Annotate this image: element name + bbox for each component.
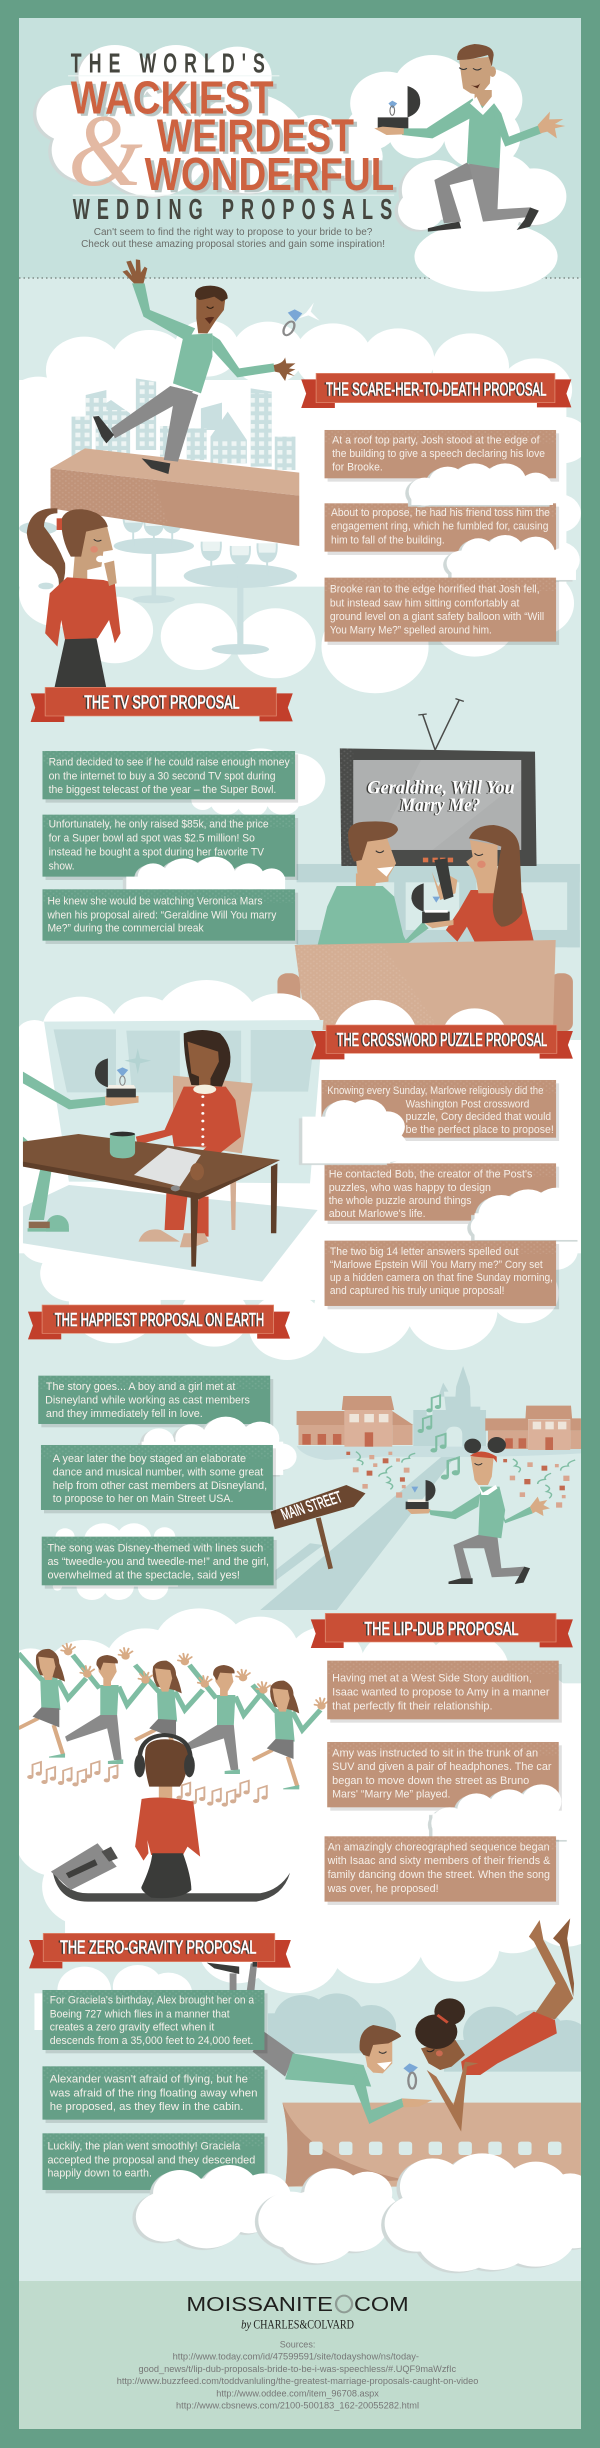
green box two [42, 2066, 268, 2123]
text: scare three: but instead saw him sitting comfortably at [330, 596, 520, 609]
green box one [38, 1376, 273, 1427]
dancer hands [61, 1644, 328, 1710]
text: lip-dub one: that perfectly fit their relationship. [332, 1699, 493, 1712]
title block [68, 44, 565, 250]
cloud: man lower [398, 153, 566, 243]
man's leg [23, 1137, 69, 1232]
brown box two [327, 1742, 562, 1811]
green box three [42, 1537, 277, 1589]
main street buildings right [485, 1406, 582, 1450]
text: tv two: for a Super bowl ad spot was $2.5 million! So [49, 831, 255, 844]
footer background [19, 2281, 581, 2429]
logo: by Charles & Colvard: CHARLES&COLVARD [253, 2317, 354, 2331]
text: crossword three: The two big 14 letter answers spelled out [330, 1245, 519, 1258]
brown box one [327, 1661, 562, 1723]
title rules [68, 75, 394, 196]
sofa [277, 940, 573, 1032]
ring box in hand [365, 85, 420, 135]
falling man [93, 259, 295, 474]
man with mouse ears [406, 1437, 550, 1584]
brown box two [325, 1163, 559, 1224]
dancer one [18, 1649, 86, 1758]
text: tv three: when his proposal aired: “Geraldine Will You marry [47, 908, 276, 921]
brown box three [325, 1836, 559, 1905]
castle [297, 1366, 581, 1460]
brown box three [325, 1241, 559, 1309]
banner: zero-gravity: THE ZERO-GRAVITY PROPOSAL [60, 1938, 256, 1958]
brown box one [321, 1080, 559, 1141]
text: tv two: show. [49, 859, 75, 872]
text: lip-dub one: Having met at a West Side Story audition, [332, 1671, 532, 1684]
section: happiest proposal [28, 1305, 582, 1610]
text: crossword one: puzzle, Cory decided that would [406, 1110, 551, 1123]
text: scare three: Brooke ran to the edge horrified that Josh fell, [330, 582, 540, 595]
dancer five [253, 1681, 320, 1789]
text: crossword one: be the perfect place to propose! [406, 1123, 554, 1136]
rooftop tables and glasses [19, 513, 297, 655]
seated woman with headphones [51, 1735, 290, 1902]
couple on sofa [318, 821, 534, 945]
text panel: scare-her-to-death [301, 373, 576, 645]
text: tv three: He knew she would be watching Veronica Mars [47, 894, 263, 907]
section: TV spot [31, 687, 580, 1032]
section: zero-gravity [29, 1918, 589, 2193]
section: lip-dub [6, 1608, 600, 1993]
text: scare one: the building to give a speech declaring his love [332, 447, 545, 460]
text: crossword two [329, 1167, 532, 1220]
box three [325, 578, 559, 645]
sources list: http://www.oddee.com/item_96708.aspx [216, 2389, 379, 2399]
text: tv three: Me?” during the commercial break [47, 921, 204, 934]
text: crossword three [330, 1245, 553, 1297]
ampersand: & [68, 94, 143, 208]
text: happiest three: The song was Disney-themed with lines such [47, 1541, 263, 1554]
music note rows [27, 1761, 268, 1807]
logo: Moissanite.com: COM [354, 2292, 409, 2316]
story section background [19, 278, 581, 2281]
header clouds [36, 45, 566, 292]
banner: TV spot: THE TV SPOT PROPOSAL [84, 693, 240, 713]
text: tv one: Rand decided to see if he could raise enough money [49, 755, 290, 768]
section: crossword [15, 980, 581, 1360]
text: crossword two: He contacted Bob, the creator of the Post's [329, 1167, 532, 1180]
text: happiest two [53, 1452, 267, 1505]
banner: zero-gravity [29, 1933, 291, 1968]
cloud over box two [447, 535, 576, 580]
sources list: good_news/t/lip-dub-proposals-bride-to-be-i-was-speechless/#.UQF9maWzfIc [139, 2365, 456, 2375]
text: zero-gravity three: Luckily, the plan went smoothly! Graciela [47, 2139, 241, 2152]
green box two [42, 815, 298, 880]
music notes [418, 1395, 460, 1480]
big cloud: lip-dub [6, 1608, 600, 1993]
text: lip-dub three: An amazingly choreographed sequence began [328, 1840, 550, 1853]
sources list: Sources: [280, 2340, 315, 2350]
text: scare one: At a roof top party, Josh stood at the edge of [332, 433, 540, 446]
streamers [356, 1452, 575, 1498]
text: zero-gravity one: descends from a 35,000 feet to 24,000 feet. [50, 2034, 253, 2047]
airplane body [282, 2103, 581, 2187]
text: zero-gravity three: accepted the proposal and they descended [47, 2153, 255, 2166]
cloud: man base [414, 222, 558, 292]
text: scare two [331, 506, 550, 546]
text: zero-gravity three: happily down to earth. [47, 2166, 152, 2179]
text: scare three [330, 582, 544, 636]
text: lip-dub one [332, 1671, 550, 1712]
banner: crossword [311, 1025, 573, 1059]
grey clouds behind couple [268, 1993, 589, 2072]
text: lip-dub three: was over, he proposed! [327, 1882, 439, 1895]
confetti [346, 1452, 569, 1508]
text: happiest one: Disneyland while working as cast members [45, 1393, 250, 1406]
city skyline [72, 378, 295, 470]
logo: Moissanite.com: MOISSANITE [186, 2292, 333, 2316]
banner: TV spot [31, 687, 293, 722]
woman watching [27, 508, 121, 688]
header proposing man [402, 44, 565, 232]
cloud over brown box one [302, 1099, 407, 1163]
text: crossword two: about Marlowe's life. [329, 1207, 426, 1220]
big cloud: scare-her-to-death [4, 320, 589, 693]
text: tv three [47, 894, 276, 934]
text: scare two: About to propose, he had his friend toss him the [331, 506, 550, 519]
sources list: http://www.buzzfeed.com/toddvanluling/the-greatest-marriage-proposals-caught-on-video [117, 2377, 478, 2387]
icon: floating ring [403, 2063, 418, 2089]
banner: scare-her-to-death [301, 373, 571, 408]
park road and shadows [260, 1447, 463, 1610]
logo: by Charles & Colvard [241, 2317, 354, 2331]
banner: happiest proposal: THE HAPPIEST PROPOSAL ON EARTH [55, 1310, 264, 1331]
text: happiest two: A year later the boy staged an elaborate [53, 1452, 246, 1465]
text: tv one: the biggest telecast of the year – the Super Bowl. [49, 783, 276, 796]
text: happiest one: The story goes... A boy and a girl met at [46, 1380, 236, 1393]
floating woman [415, 1918, 574, 2132]
cloud between happy boxes [142, 1417, 297, 1475]
dining room [23, 1020, 323, 1282]
text: crossword three: up a hidden camera on that fine Sunday morning, [330, 1271, 553, 1284]
text: zero-gravity one: Boeing 727 which flies in a manner that [50, 2007, 230, 2020]
text: scare one [332, 433, 545, 473]
cloud over green box two [126, 857, 285, 895]
text: happiest three: overwhelmed at the spectacle, said yes! [47, 1568, 240, 1581]
text: zero-gravity two: was afraid of the ring floating away when [49, 2086, 258, 2099]
scene: scare-her-to-death illustration [19, 259, 320, 688]
text: happiest one [45, 1380, 250, 1420]
dining table [23, 1134, 280, 1267]
sources list [117, 2340, 478, 2411]
title: wedding proposals: WEDDING PROPOSALS [73, 194, 392, 226]
building ledge [51, 448, 299, 546]
banner: happiest proposal [28, 1305, 290, 1339]
text: scare one: for Brooke. [332, 460, 383, 473]
text: lip-dub three: family dancing down the street. When the song [328, 1868, 550, 1881]
icon: flying ring [281, 303, 320, 337]
floating man [207, 1962, 432, 2124]
green box one [42, 1990, 268, 2053]
tv message: Marry Me? [399, 793, 480, 816]
cloud over box one [409, 463, 553, 506]
text: scare two: engagement ring, which he fumbled for, causing [331, 519, 548, 532]
logo: Moissanite.com [186, 2292, 409, 2316]
sign: main street [271, 1485, 365, 1569]
cloud over brown box two [471, 1188, 581, 1240]
subtitle [81, 227, 385, 250]
text: happiest three [47, 1541, 269, 1581]
sign: main street: MAIN STREET [278, 1487, 345, 1523]
main street buildings left [297, 1396, 413, 1447]
television [340, 699, 537, 866]
green box three [42, 889, 298, 944]
tv message [367, 776, 515, 816]
text: crossword two: the whole puzzle around things [329, 1194, 472, 1207]
cloud C [385, 2153, 600, 2272]
text: zero-gravity one: creates a zero gravity effect when it [50, 2020, 215, 2033]
text: lip-dub three: with Isaac and sixty members of their friends & [327, 1854, 550, 1867]
text: crossword two: puzzles, who was happy to design [329, 1181, 491, 1194]
text: crossword one [327, 1084, 554, 1136]
text: lip-dub one: Isaac wanted to propose to Amy in a manner [332, 1685, 550, 1698]
text: tv one: on the internet to buy a 30 second TV spot during [49, 769, 276, 782]
dancers [18, 1644, 328, 1789]
tv message: Geraldine, Will You [367, 776, 515, 798]
small cloud behind box one [191, 748, 325, 817]
text: scare three: You Marry Me?” spelled around him. [330, 623, 492, 636]
text: tv one [49, 755, 290, 796]
green box three [42, 2133, 268, 2193]
text: lip-dub two: SUV and given a pair of headphones. The car [332, 1760, 552, 1773]
chair [173, 1076, 253, 1230]
sources list: http://www.today.com/id/47599591/site/todayshow/ns/today- [173, 2352, 419, 2362]
text: lip-dub three [327, 1840, 550, 1895]
text: zero-gravity two [49, 2072, 258, 2113]
header background [19, 18, 581, 278]
text: happiest two: to propose to her on Main Street USA. [53, 1492, 233, 1505]
green box one [42, 751, 298, 803]
living-room wall [297, 864, 580, 947]
cloud A [136, 2165, 291, 2248]
mug and newspaper [110, 1132, 204, 1191]
text: lip-dub two: began to move down the street as Bruno [332, 1774, 530, 1787]
title: wackiest weirdest wonderful: WEIRDEST [157, 110, 354, 162]
title: wackiest weirdest wonderful: WACKIEST [71, 72, 274, 124]
box one [325, 430, 559, 482]
cloud over brown box two [431, 1784, 570, 1840]
text: crossword one: Washington Post crossword [406, 1097, 529, 1110]
cloud: man upper [346, 55, 522, 170]
woman at table [136, 1030, 241, 1247]
cloud behind last story box [53, 1523, 178, 1600]
box two [325, 503, 559, 555]
text: lip-dub two: Amy was instructed to sit in the trunk of an [332, 1746, 538, 1759]
subtitle: Can't seem to find the right way to propose to your bride to be? [94, 227, 372, 238]
text: zero-gravity one: For Graciela's birthday, Alex brought her on a [50, 1993, 254, 2006]
sources list: http://www.cbsnews.com/2100-500183_162-20055282.html [176, 2401, 419, 2411]
banner: lip-dub [311, 1613, 573, 1648]
text: tv two: Unfortunately, he only raised $85k, and the price [49, 817, 269, 830]
text: happiest three: as “tweedle-you and tweedle-me!” and the girl, [47, 1555, 269, 1568]
text: tv two [49, 817, 269, 872]
proposing arm and ring box [23, 1048, 151, 1109]
dancer two [65, 1655, 147, 1764]
text: zero-gravity three [47, 2139, 255, 2179]
footer [117, 2292, 478, 2411]
cloud: title backdrop [36, 45, 383, 197]
dotted header divider [19, 277, 581, 279]
text: happiest two: dance and musical number, with some great [53, 1465, 264, 1478]
text: tv two: instead he bought a spot during her favorite TV [49, 845, 264, 858]
text: lip-dub two: Mars' “Marry Me” played. [332, 1787, 450, 1800]
text: zero-gravity two: he proposed, as they flew in the cabin. [50, 2100, 243, 2113]
cloud B [258, 2168, 398, 2263]
text: zero-gravity two: Alexander wasn't afraid of flying, but he [50, 2072, 248, 2085]
text: happiest one: and they immediately fell in love. [46, 1407, 203, 1420]
front clouds near footer [136, 2153, 600, 2272]
text: lip-dub two [332, 1746, 552, 1800]
text: scare two: him to fall of the building. [331, 533, 445, 546]
green box two [41, 1445, 276, 1513]
text: crossword three: and captured his truly unique proposal! [330, 1284, 504, 1297]
text: happiest two: help from other cast members at Disneyland, [53, 1479, 267, 1492]
small white cloud [34, 1965, 192, 2030]
dancer four [182, 1665, 264, 1774]
text: scare three: ground level on a giant safety balloon with “Will [330, 610, 544, 623]
title: the world's: THE WORLD'S [71, 47, 265, 78]
text: zero-gravity one [50, 1993, 254, 2047]
dancer three [135, 1661, 203, 1769]
title: wackiest weirdest wonderful [71, 72, 394, 200]
text: crossword three: “Marlowe Epstein Will You Marry me?” Cory set [330, 1258, 543, 1271]
big cloud: crossword [15, 980, 581, 1360]
subtitle: Check out these amazing proposal stories and gain some inspiration! [81, 239, 385, 250]
logo: by Charles & Colvard: by [241, 2317, 252, 2331]
title: wackiest weirdest wonderful: WONDERFUL [145, 148, 394, 200]
